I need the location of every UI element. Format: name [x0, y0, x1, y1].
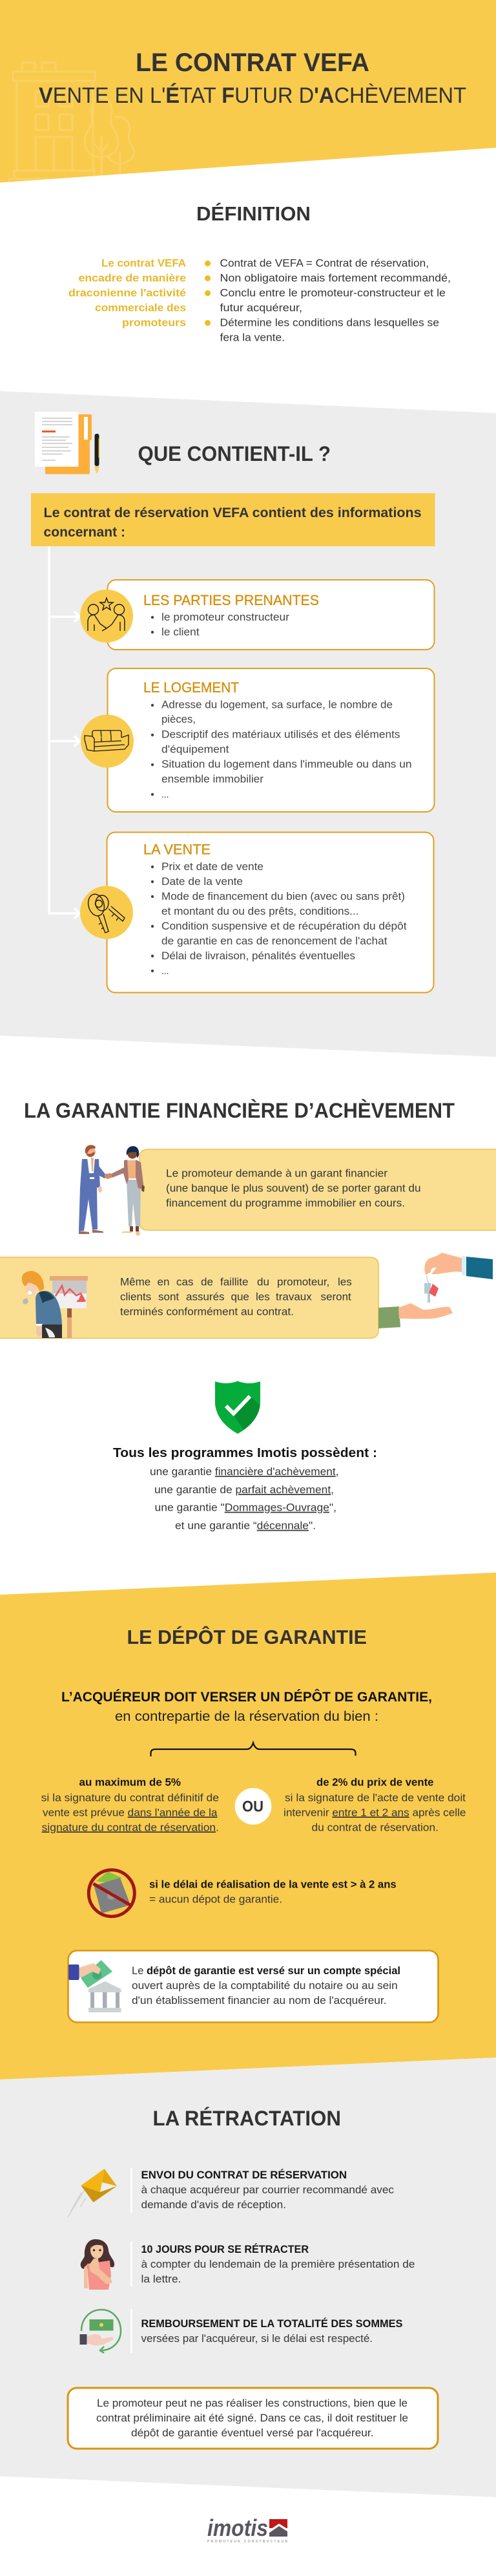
- icon: businesspeople shaking hands: [79, 1145, 145, 1236]
- text block: 5 percent: signature du contrat de réservation .: [42, 1821, 219, 1833]
- text block: imotis guarantees: Tous les programmes Imotis possèdent :: [113, 1446, 377, 1460]
- list: parties: le promoteur constructeur: [161, 611, 289, 623]
- callout: faillite du promoteur: [0, 1257, 378, 1338]
- list: definition points: fera la vente.: [220, 331, 285, 344]
- heading: définition: DÉFINITION: [196, 202, 311, 225]
- list: definition points: Conclu entre le promoteur-constructeur et le: [220, 287, 446, 299]
- text block: gold summary: Le contrat VEFA: [101, 257, 186, 269]
- text block: 5 percent: [41, 1776, 219, 1833]
- list: vente: Délai de livraison, pénalités éventuelles: [161, 950, 355, 962]
- list: vente: Date de la vente: [161, 875, 243, 888]
- list: vente: ...: [161, 964, 169, 977]
- panel: garantie financière: [0, 1099, 496, 1532]
- text: envoi du contrat: demande d'avis de réception.: [141, 2198, 286, 2211]
- icon: sofa: [81, 715, 134, 768]
- list: definition points: Détermine les conditions dans lesquelles se: [220, 317, 439, 328]
- callout: faillite du promoteur: terminés conformément au contrat.: [120, 1306, 294, 1318]
- callout: faillite du promoteur: clients: [120, 1291, 151, 1303]
- text: dix jours: à compter du lendemain de la première présentation de: [141, 2258, 415, 2270]
- text: dix jours: [141, 2243, 415, 2285]
- text block: acquéreur: [61, 1689, 432, 1724]
- callout: faillite du promoteur: sont: [158, 1291, 179, 1303]
- text block: gold summary: [68, 257, 186, 328]
- text block: 2 percent: intervenir entre 1 et 2 ans après celle: [284, 1806, 466, 1818]
- icon: keys: [80, 886, 133, 939]
- text: compte spécial: ouvert auprès de la comptabilité du notaire ou au sein: [132, 1979, 398, 1992]
- list: parties: le client: [161, 626, 200, 638]
- callout: faillite du promoteur: de: [201, 1276, 213, 1288]
- step: envoi du contrat: [68, 2168, 394, 2217]
- text: dix jours: 10 JOURS POUR SE RÉTRACTER: [141, 2243, 309, 2255]
- panel: le logement: [81, 668, 434, 812]
- callout: restitution: [68, 2388, 438, 2449]
- title: LE CONTRAT VEFA: [136, 48, 369, 77]
- list: logement: pièces,: [161, 713, 196, 725]
- text: envoi du contrat: [141, 2169, 394, 2211]
- list: vente: [151, 860, 407, 977]
- text: compte spécial: d'un établissement financier au nom de l'acquéreur.: [132, 1994, 386, 2007]
- text block: imotis guarantees: et une garantie “décennale".: [175, 1520, 316, 1532]
- heading: la vente: LA VENTE: [143, 842, 211, 857]
- list: parties: [151, 611, 289, 638]
- callout: faillite du promoteur: cas: [176, 1276, 193, 1288]
- callout: faillite du promoteur: les: [256, 1291, 270, 1303]
- list: definition points: Non obligatoire mais fortement recommandé,: [220, 271, 451, 284]
- text: dix jours: la lettre.: [141, 2273, 181, 2285]
- callout: faillite du promoteur: faillite: [220, 1276, 248, 1288]
- callout: faillite du promoteur: seront: [320, 1291, 351, 1303]
- callout: faillite du promoteur: promoteur,: [277, 1276, 329, 1288]
- callout: restitution: Le promoteur peut ne pas réaliser les constructions, bien que le: [97, 2397, 408, 2409]
- text: remboursement: [141, 2317, 403, 2345]
- callout: faillite du promoteur: assurés: [186, 1291, 225, 1303]
- panel: dépôt de garantie: [0, 1573, 496, 2080]
- icon: hand depositing money in bank: [68, 1960, 121, 2012]
- list: logement: d'équipement: [161, 743, 229, 755]
- icon: flying envelope: [68, 2169, 117, 2217]
- text block: 5 percent: au maximum de 5%: [79, 1776, 181, 1789]
- list: logement: Adresse du logement, sa surface, le nombre de: [161, 698, 393, 711]
- list: vente: Condition suspensive et de récupération du dépôt: [161, 920, 407, 932]
- icon: bankrupt man with falling chart: [22, 1271, 88, 1338]
- text block: no deposit: [149, 1879, 397, 1906]
- icon: woman raising hand: [81, 2239, 114, 2290]
- text block: gold summary: promoteurs: [122, 317, 186, 328]
- text block: no deposit: si le délai de réalisation de la vente est > à 2 ans: [149, 1879, 397, 1891]
- subtitle: VENTE EN L'ÉTAT FUTUR D'ACHÈVEMENT: [39, 83, 466, 108]
- callout: faillite du promoteur: que: [231, 1291, 249, 1303]
- text block: acquéreur: L’ACQUÉREUR DOIT VERSER UN DÉPÔT DE GARANTIE,: [61, 1689, 432, 1705]
- callout: faillite du promoteur: travaux: [276, 1291, 312, 1303]
- callout: compte spécial: [68, 1951, 438, 2022]
- icon: brace: [151, 1743, 355, 1756]
- step: remboursement: [80, 2309, 403, 2353]
- callout: garant financier: Le promoteur demande à un garant financier: [166, 1167, 388, 1180]
- icon: OU circle: [235, 1788, 271, 1825]
- icon: OU circle: OU: [242, 1798, 264, 1816]
- icon: handshake with star: [80, 590, 133, 643]
- text block: 2 percent: [284, 1776, 466, 1833]
- callout: intro bar: concernant :: [44, 525, 125, 540]
- list: vente: Prix et date de vente: [161, 860, 264, 873]
- text block: gold summary: encadre de manière: [79, 273, 186, 284]
- callout: garant financier: [140, 1149, 496, 1230]
- list: logement: Situation du logement dans l'immeuble ou dans un: [161, 758, 412, 771]
- list: logement: ...: [161, 788, 169, 800]
- icon: document and pen: [35, 412, 99, 474]
- icon: forbidden safe: [88, 1870, 134, 1917]
- panel: définition: [68, 202, 451, 344]
- callout: faillite du promoteur: Même: [120, 1276, 150, 1288]
- callout: restitution: contrat préliminaire ait été signé. Dans ce cas, il doit restituer le: [96, 2412, 408, 2424]
- icon: refund hand and banknote: [80, 2310, 121, 2353]
- text block: acquéreur: en contrepartie de la réservation du bien :: [115, 1709, 378, 1724]
- text: compte spécial: Le dépôt de garantie est versé sur un compte spécial: [132, 1964, 400, 1977]
- text: remboursement: versées par l'acquéreur, si le délai est respecté.: [141, 2332, 373, 2345]
- callout: garant financier: financement du programme immobilier en cours.: [166, 1197, 405, 1209]
- callout: restitution: dépôt de garantie éventuel versé par l'acquéreur.: [131, 2427, 373, 2439]
- list: logement: ensemble immobilier: [161, 773, 264, 785]
- heading: la rétractation: LA RÉTRACTATION: [152, 2107, 341, 2130]
- heading: dépôt de garantie: LE DÉPÔT DE GARANTIE: [127, 1625, 367, 1648]
- text: envoi du contrat: ENVOI DU CONTRAT DE RÉSERVATION: [141, 2169, 347, 2181]
- text block: 2 percent: de 2% du prix de vente: [316, 1776, 434, 1789]
- list: definition points: [205, 257, 451, 344]
- list: logement: [151, 698, 412, 800]
- text: remboursement: REMBOURSEMENT DE LA TOTALITÉ DES SOMMES: [141, 2317, 403, 2330]
- heading: les parties prenantes: LES PARTIES PRENANTES: [143, 592, 319, 608]
- panel: la rétractation: [0, 2058, 496, 2497]
- heading: que contient-il: QUE CONTIENT-IL ?: [138, 442, 331, 465]
- icon: green shield with check: [215, 1381, 260, 1434]
- text block: imotis guarantees: [113, 1446, 377, 1532]
- step: dix jours: [81, 2239, 415, 2290]
- callout: faillite du promoteur: en: [158, 1276, 169, 1288]
- heading: le logement: LE LOGEMENT: [143, 679, 239, 696]
- text block: 2 percent: du contrat de réservation.: [311, 1821, 439, 1833]
- text block: no deposit: = aucun dépot de garantie.: [149, 1893, 282, 1906]
- text block: imotis guarantees: une garantie de parfait achèvement,: [154, 1484, 334, 1496]
- callout: intro bar: [31, 493, 435, 546]
- list: logement: Descriptif des matériaux utilisés et des éléments: [161, 728, 400, 741]
- logo: imotis: imotis: [207, 2515, 268, 2541]
- heading: garantie financière: LA GARANTIE FINANCIÈRE D’ACHÈVEMENT: [24, 1099, 455, 1122]
- text block: 2 percent: si la signature de l'acte de vente doit: [285, 1791, 466, 1804]
- text block: gold summary: commerciale des: [95, 303, 186, 314]
- list: definition points: Contrat de VEFA = Contrat de réservation,: [220, 257, 429, 269]
- text block: 5 percent: vente est prévue dans l'année de la: [43, 1806, 218, 1818]
- panel: que contient-il: [0, 391, 496, 1057]
- list: vente: et montant du ou des prêts, conditions...: [161, 905, 359, 917]
- callout: faillite du promoteur: les: [338, 1276, 352, 1288]
- panel: header: [0, 0, 496, 186]
- text block: gold summary: draconienne l'activité: [68, 287, 186, 299]
- callout: faillite du promoteur: du: [257, 1276, 269, 1288]
- panel: les parties prenantes: [80, 580, 434, 650]
- callout: intro bar: Le contrat de réservation VEFA contient des informations: [44, 506, 421, 520]
- list: vente: de garantie en cas de renoncement de l'achat: [161, 935, 388, 947]
- arrows: connector tree: [49, 546, 79, 919]
- text block: imotis guarantees: une garantie financière d'achèvement,: [150, 1465, 339, 1478]
- list: definition points: futur acquéreur,: [220, 301, 302, 314]
- text: compte spécial: [132, 1964, 400, 2007]
- text block: imotis guarantees: une garantie "Dommages-Ouvrage ",: [155, 1502, 336, 1514]
- icon: hands exchanging keys: [378, 1253, 493, 1328]
- icon: building and trees: [9, 63, 134, 186]
- panel: la vente: [80, 833, 434, 993]
- list: vente: Mode de financement du bien (avec ou sans prêt): [161, 890, 405, 902]
- text: envoi du contrat: à chaque acquéreur par courrier recommandé avec: [141, 2184, 394, 2196]
- callout: garant financier: (une banque le plus souvent) de se porter garant du: [166, 1182, 421, 1195]
- text block: 5 percent: si la signature du contrat définitif de: [41, 1791, 219, 1804]
- logo: imotis: PROMOTEUR CONSTRUCTEUR: [207, 2540, 287, 2544]
